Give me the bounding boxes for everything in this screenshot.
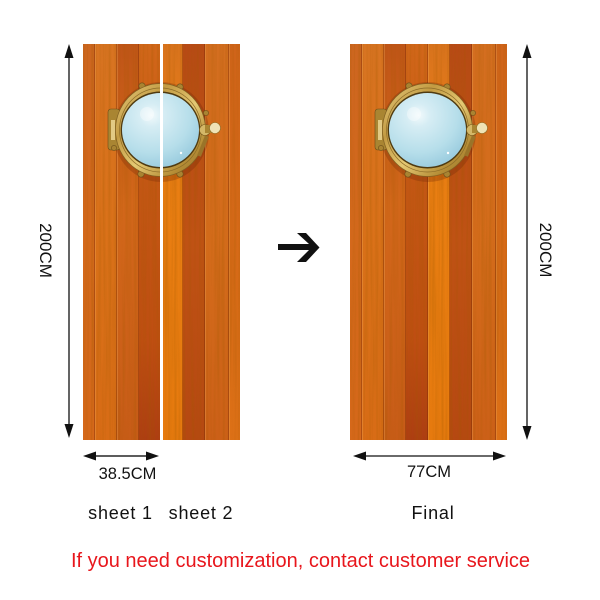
right height arrow (522, 44, 532, 440)
label: 77CM: 77CM (407, 463, 451, 481)
width arrow 38.5CM (83, 452, 159, 460)
label: 38.5CM: 38.5CM (99, 465, 156, 483)
center arrow (278, 233, 320, 262)
width arrow 77CM (353, 452, 506, 460)
label: Final: Final (411, 503, 455, 523)
label: left 200CM: 200CM (36, 223, 55, 278)
left height arrow (64, 44, 74, 438)
door sheets 1 and 2 (83, 44, 240, 440)
customization note: If you need customization, contact customer service (71, 550, 530, 572)
label: sheet 1: sheet 1 (88, 503, 153, 523)
label: right 200CM: 200CM (536, 223, 555, 277)
white gap between sheets (160, 44, 163, 440)
label: sheet 2: sheet 2 (169, 503, 233, 523)
final door (350, 44, 507, 440)
